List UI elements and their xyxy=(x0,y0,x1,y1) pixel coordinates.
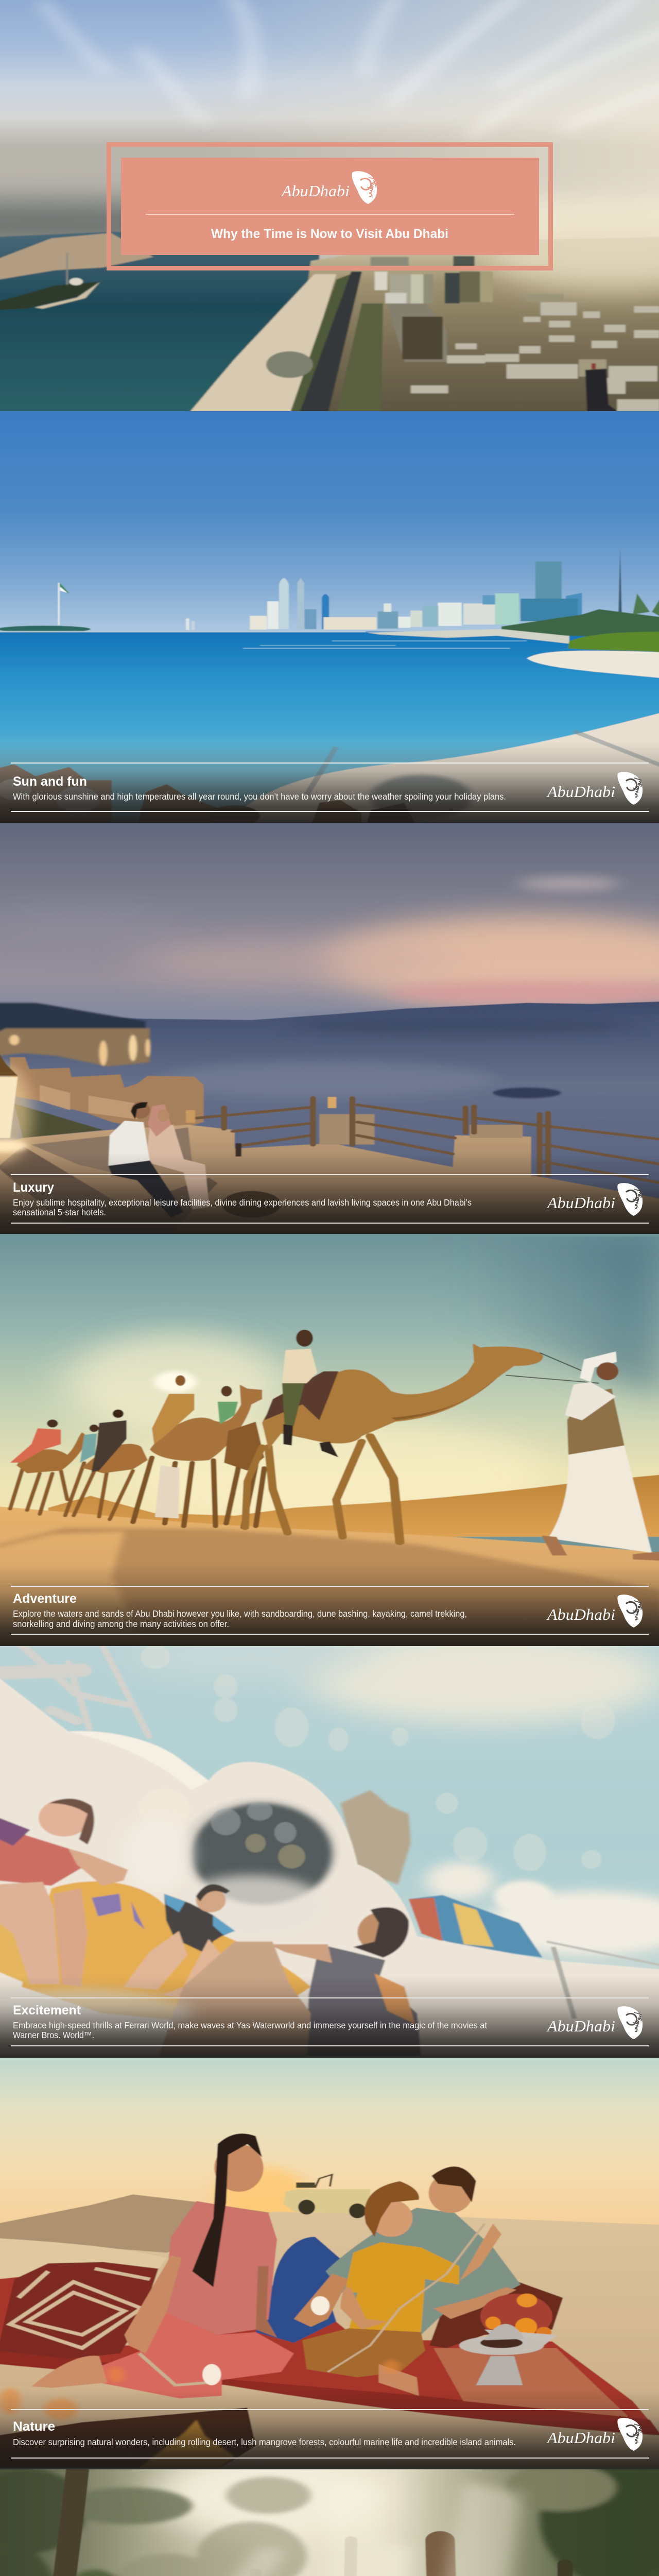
caption heading: Excitement xyxy=(13,2003,81,2018)
lead camel legs xyxy=(245,1436,400,1542)
sea xyxy=(0,232,319,415)
low-rise houses xyxy=(411,294,659,415)
silver dish xyxy=(459,2324,544,2385)
dunes xyxy=(0,1002,659,1238)
rug xyxy=(0,2277,659,2435)
photo: turquoise bay and skyline xyxy=(0,456,659,823)
far camels xyxy=(10,1463,133,1520)
slide support xyxy=(547,1942,659,1965)
sun glow xyxy=(216,2166,309,2225)
stick and marshmallow xyxy=(140,2353,209,2385)
logo xyxy=(546,2418,644,2451)
logo: AbuDhabi xyxy=(546,1194,615,1212)
man xyxy=(108,1121,150,1166)
foreground sand xyxy=(226,713,659,826)
logo: أبوظبي xyxy=(629,777,644,799)
caption xyxy=(0,1570,659,1646)
caption heading: Nature xyxy=(13,2419,55,2434)
panel: adventure xyxy=(0,1234,659,1646)
photo: camel caravan crossing dunes xyxy=(0,1236,659,1642)
middle camels xyxy=(133,1458,264,1528)
promenade park xyxy=(266,351,313,378)
small lanterns xyxy=(328,1097,336,1108)
caption xyxy=(0,2394,659,2469)
left palm fronds xyxy=(0,2469,192,2576)
logo: أبوظبي xyxy=(629,1188,644,1210)
island xyxy=(0,282,100,310)
tv mast xyxy=(618,548,622,613)
distant palms xyxy=(112,2477,311,2576)
lantern xyxy=(0,1064,31,1164)
yellow tube xyxy=(22,1882,311,2027)
logo: أبوظبي xyxy=(629,1600,644,1621)
fruit bowl xyxy=(480,2294,557,2346)
sea xyxy=(0,632,659,826)
caption heading: Adventure xyxy=(13,1591,77,1606)
sky xyxy=(0,2054,659,2229)
panel: sun and fun xyxy=(0,411,659,823)
reins xyxy=(506,1353,599,1383)
horizon haze xyxy=(0,200,285,248)
light rays xyxy=(137,2482,523,2576)
logo: أبوظبي xyxy=(363,176,378,198)
title frame xyxy=(107,142,553,270)
tunnel xyxy=(181,1798,338,1904)
lead rider xyxy=(282,1349,317,1384)
hedge xyxy=(568,632,659,652)
left cushion xyxy=(0,2262,159,2359)
right cushion xyxy=(429,2282,563,2348)
standing guide far xyxy=(155,1465,180,1518)
handles xyxy=(92,1894,145,1929)
sky xyxy=(0,411,659,632)
couple xyxy=(108,1101,209,1217)
logo xyxy=(281,171,378,204)
riders middle xyxy=(152,1394,195,1444)
clouds xyxy=(485,1891,659,1955)
dark tower xyxy=(585,368,621,415)
caption text: Embrace high-speed thrills at Ferrari World, make waves at Yas Waterworld and immerse yourself in the magic of the movies at xyxy=(13,2020,487,2030)
beach xyxy=(187,274,336,415)
guide xyxy=(542,1351,659,1561)
seating cushion xyxy=(31,1127,192,1173)
dune hill xyxy=(0,2194,659,2293)
riders far xyxy=(10,1428,61,1463)
panel: excitement xyxy=(0,1646,659,2058)
city ground xyxy=(289,237,659,415)
flagpole xyxy=(58,583,60,625)
towers xyxy=(370,256,493,362)
photo: desert terrace at dusk xyxy=(0,850,659,1224)
photo: family picnic in the desert xyxy=(0,2075,659,2468)
woman xyxy=(31,2133,294,2398)
logo xyxy=(546,2006,644,2039)
distant island xyxy=(0,625,91,633)
right palm fronds xyxy=(493,2455,659,2576)
caption xyxy=(0,1981,659,2058)
boy xyxy=(124,1884,235,2000)
logo: AbuDhabi xyxy=(546,2429,615,2447)
tree strip xyxy=(289,272,358,415)
terrace floor xyxy=(0,1125,659,1238)
man xyxy=(158,1907,421,2058)
sun glow xyxy=(65,1333,285,1434)
photo: girl in a sunlit palm oasis xyxy=(0,2469,659,2576)
photo: aerial view of the Abu Dhabi coast xyxy=(0,0,659,411)
rocks xyxy=(0,764,417,826)
land spit xyxy=(0,233,153,280)
distant slide tube xyxy=(409,1895,543,1958)
title: Why the Time is Now to Visit Abu Dhabi xyxy=(211,227,448,241)
logo: AbuDhabi xyxy=(546,783,615,801)
caravan shadow xyxy=(0,1528,659,1650)
sunset glow xyxy=(323,916,659,1006)
lead camel xyxy=(262,1344,543,1449)
buoys xyxy=(243,640,527,649)
water slide body xyxy=(0,1675,659,2058)
caption text: Enjoy sublime hospitality, exceptional leisure facilities, divine dining experiences and lavish living spaces in one Abu Dhabi’s xyxy=(13,1197,472,1208)
upper beach xyxy=(527,651,659,678)
caption text line 2: Warner Bros. World™. xyxy=(13,2030,94,2040)
caption heading: Sun and fun xyxy=(13,774,87,789)
logo: AbuDhabi xyxy=(546,2017,615,2035)
caption text: Discover surprising natural wonders, including rolling desert, lush mangrove forests, colourful marine life and incredible island animals. xyxy=(13,2437,516,2447)
caption text line 2: sensational 5-star hotels. xyxy=(13,1207,106,1217)
table xyxy=(222,1191,281,1217)
caption xyxy=(0,2469,659,2576)
caption xyxy=(0,747,659,823)
logo xyxy=(546,772,644,805)
photo: family on a water slide xyxy=(0,1646,659,2056)
caption text: Explore the waters and sands of Abu Dhabi however you like, with sandboarding, dune bashing, kayaking, camel trekking, xyxy=(13,1608,467,1619)
wooden railings xyxy=(197,1098,659,1183)
panel: hero cover xyxy=(0,0,659,411)
man xyxy=(256,2166,521,2343)
spray haze xyxy=(0,1641,659,2058)
back dunes xyxy=(48,1475,659,1537)
saddle xyxy=(264,1371,338,1420)
panel: culture xyxy=(0,2469,659,2576)
logo: AbuDhabi xyxy=(546,1605,615,1623)
caption text line 2: snorkelling and diving among the many activities on offer. xyxy=(13,1619,229,1629)
fire xyxy=(0,2408,256,2469)
logo: أبوظبي xyxy=(629,2011,644,2033)
panel: nature xyxy=(0,2058,659,2469)
distant hotel xyxy=(0,1003,146,1035)
palm trunks xyxy=(42,2466,571,2576)
boy xyxy=(302,2181,501,2396)
title banner xyxy=(121,158,539,255)
cloud streaks xyxy=(43,0,659,136)
girl xyxy=(0,1799,128,1987)
logo: AbuDhabi xyxy=(281,182,350,200)
skyline xyxy=(186,562,582,630)
sky xyxy=(0,1641,659,2058)
slide scaffolding xyxy=(1,1645,149,1737)
logo: أبوظبي xyxy=(629,2423,644,2445)
sand xyxy=(0,2212,659,2469)
logo xyxy=(546,1183,644,1216)
rock xyxy=(340,1790,411,1885)
sky xyxy=(0,1235,659,1534)
shore and trees xyxy=(366,629,569,643)
caption xyxy=(0,1158,659,2265)
foreground sand xyxy=(0,1506,659,1650)
background canopy xyxy=(0,2466,659,2576)
lawn xyxy=(14,1104,103,1138)
caption heading: Luxury xyxy=(13,1180,54,1195)
road xyxy=(299,272,362,415)
panel: luxury xyxy=(0,823,659,1234)
caption text: With glorious sunshine and high temperatures all year round, you don’t have to worry about the weather spoiling your holiday plans. xyxy=(13,791,506,802)
sky xyxy=(0,823,659,1029)
sky xyxy=(0,0,659,264)
jeep xyxy=(283,2175,370,2218)
woman xyxy=(146,1125,209,1210)
wall blocks xyxy=(10,1057,204,1133)
mist xyxy=(175,1875,328,1939)
logo xyxy=(546,1595,644,1628)
bokeh xyxy=(141,1645,615,1871)
